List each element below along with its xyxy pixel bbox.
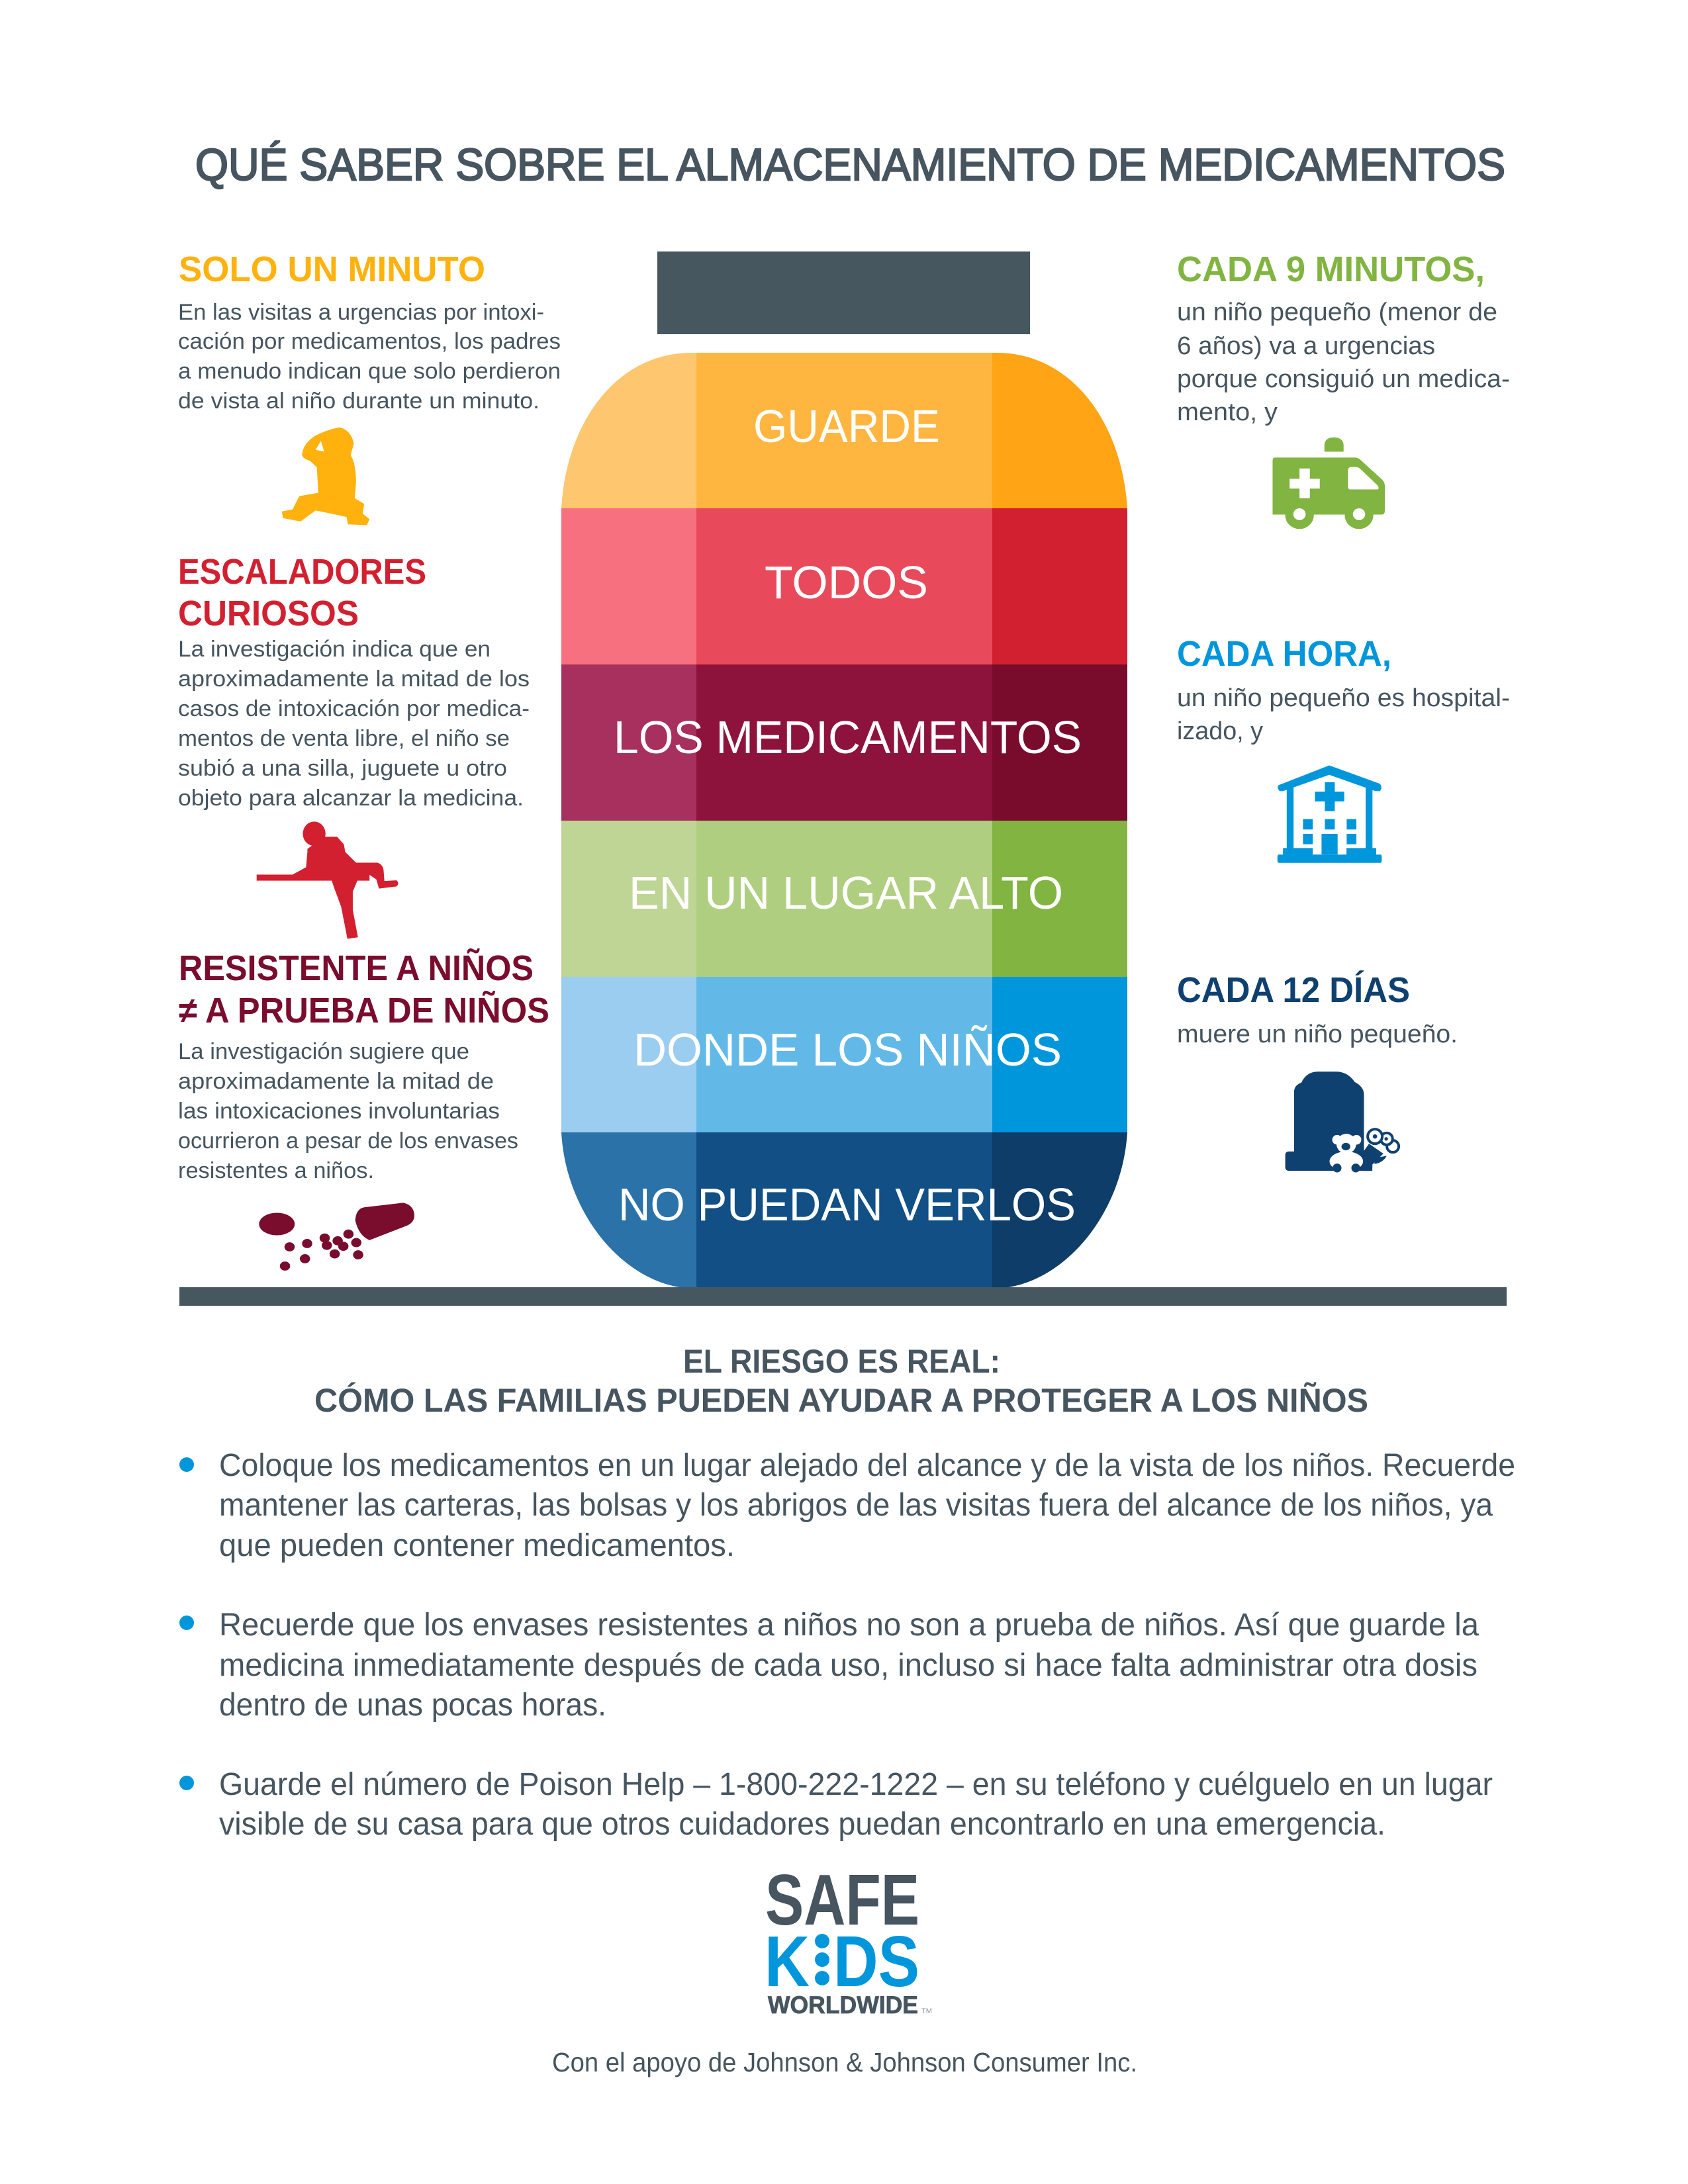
shelf: [179, 1287, 1507, 1306]
text block: cada 9 minutos: [1177, 298, 1510, 426]
heading: escaladores curiosos: ESCALADORES: [178, 552, 426, 592]
heading: cada 12 días: CADA 12 DÍAS: [1177, 970, 1410, 1010]
text block: escaladores curiosos: mentos de venta libre, el niño se: [178, 726, 510, 751]
panel: resistente a niños: [178, 948, 549, 1271]
text block: escaladores curiosos: objeto para alcanzar la medicina.: [178, 786, 524, 811]
bottle label text: EN UN LUGAR ALTO: [629, 867, 1063, 919]
text block: solo un minuto: En las visitas a urgencias por intoxi-: [178, 300, 544, 325]
logo: Safe Kids Worldwide: [765, 1860, 932, 2019]
text block: solo un minuto: cación por medicamentos, los padres: [178, 329, 561, 354]
text block: cada hora: [1177, 684, 1510, 745]
text block: resistente a niños: resistentes a niños.: [178, 1158, 374, 1183]
logo: Safe Kids Worldwide: WORLDWIDE: [768, 1991, 918, 2019]
panel: escaladores curiosos: [178, 552, 530, 938]
text block: escaladores curiosos: aproximadamente la mitad de los: [178, 666, 530, 692]
bottle label text: [614, 400, 1082, 1230]
list item 2: medicina inmediatamente después de cada uso, incluso si hace falta administrar otra dosis: [219, 1648, 1477, 1683]
text block: resistente a niños: [178, 1039, 518, 1183]
text block: solo un minuto: a menudo indican que solo perdieron: [178, 359, 561, 384]
text block: resistente a niños: ocurrieron a pesar de los envases: [178, 1128, 518, 1154]
list item 1: [179, 1448, 1515, 1563]
text block: cada 9 minutos: un niño pequeño (menor de: [1177, 298, 1497, 326]
icon: hospital: [1278, 766, 1382, 863]
logo: Safe Kids Worldwide: SAFE: [765, 1860, 919, 1940]
logo: Safe Kids Worldwide: K: [765, 1921, 810, 2002]
logo: Safe Kids Worldwide: DS: [833, 1921, 919, 2002]
list item 2: dentro de unas pocas horas.: [219, 1688, 606, 1723]
heading: resistente a niños: RESISTENTE A NIÑOS: [179, 948, 534, 988]
text block: resistente a niños: las intoxicaciones involuntarias: [178, 1099, 500, 1124]
icon: gravestone with teddy and flowers: [1286, 1071, 1399, 1172]
list item 3: visible de su casa para que otros cuidadores puedan encontrarlo en una emergencia.: [219, 1807, 1385, 1842]
bottle label text: GUARDE: [753, 400, 940, 452]
list item 2: [179, 1608, 1479, 1723]
text block: cada 9 minutos: mento, y: [1177, 398, 1278, 426]
list item 3: [179, 1767, 1493, 1842]
text block: solo un minuto: [178, 300, 561, 414]
heading: escaladores curiosos: CURIOSOS: [178, 594, 359, 633]
heading: cada 9 minutos: CADA 9 MINUTOS,: [1177, 250, 1485, 289]
icon: toddler: [282, 428, 369, 525]
bottle label text: DONDE LOS NIÑOS: [633, 1024, 1062, 1075]
footer credit: Con el apoyo de Johnson & Johnson Consumer Inc.: [552, 2047, 1137, 2077]
heading: escaladores curiosos: [178, 552, 426, 633]
text block: resistente a niños: La investigación sugiere que: [178, 1039, 469, 1064]
text block: escaladores curiosos: casos de intoxicación por medica-: [178, 696, 530, 721]
bottle: coloured bands: [561, 353, 1127, 1289]
heading: el riesgo es real: [314, 1343, 1368, 1419]
text block: escaladores curiosos: subió a una silla, juguete u otro: [178, 756, 507, 781]
heading: el riesgo es real: EL RIESGO ES REAL:: [683, 1343, 1000, 1380]
bullet: [179, 1615, 194, 1630]
list item 1: mantener las carteras, las bolsas y los abrigos de las visitas fuera del alcance de los niños, ya: [219, 1488, 1493, 1523]
panel: cada 9 minutos: [1177, 250, 1510, 529]
icon: spilled pills: [259, 1203, 414, 1271]
text block: resistente a niños: aproximadamente la mitad de: [178, 1069, 494, 1094]
heading: cada hora: CADA HORA,: [1177, 634, 1391, 674]
text block: cada 9 minutos: 6 años) va a urgencias: [1177, 332, 1435, 360]
heading: resistente a niños: [179, 948, 549, 1030]
heading: el riesgo es real: CÓMO LAS FAMILIAS PUEDEN AYUDAR A PROTEGER A LOS NIÑOS: [314, 1382, 1368, 1419]
panel: cada hora: [1177, 634, 1510, 863]
logo: Safe Kids Worldwide: TM: [921, 2007, 932, 2015]
panel: solo un minuto: [178, 250, 561, 525]
bottle cap: [657, 251, 1030, 334]
bottle label text: LOS MEDICAMENTOS: [614, 711, 1082, 763]
text block: solo un minuto: de vista al niño durante un minuto.: [178, 388, 539, 414]
icon: ambulance: [1272, 437, 1385, 529]
icon: climbing child: [257, 821, 398, 938]
text block: cada 9 minutos: porque consiguió un medica-: [1177, 365, 1510, 393]
text block: cada hora: izado, y: [1177, 717, 1263, 745]
heading: resistente a niños: ≠ A PRUEBA DE NIÑOS: [179, 991, 549, 1030]
title: QUÉ SABER SOBRE EL ALMACENAMIENTO DE MEDICAMENTOS: [195, 140, 1505, 190]
text block: cada 12 días: muere un niño pequeño.: [1177, 1021, 1458, 1048]
bottle label text: NO PUEDAN VERLOS: [618, 1179, 1076, 1230]
text block: cada hora: un niño pequeño es hospital-: [1177, 684, 1510, 712]
bottle label text: TODOS: [765, 557, 928, 608]
list item 1: que pueden contener medicamentos.: [219, 1528, 735, 1563]
text block: escaladores curiosos: [178, 637, 530, 811]
bullet: [179, 1776, 194, 1790]
list item 3: Guarde el número de Poison Help – 1-800-222-1222 – en su teléfono y cuélguelo en un lugar: [219, 1767, 1493, 1802]
heading: solo un minuto: SOLO UN MINUTO: [179, 250, 485, 289]
list item 1: Coloque los medicamentos en un lugar alejado del alcance y de la vista de los niños. Recuerde: [219, 1448, 1515, 1483]
panel: cada 12 días: [1177, 970, 1458, 1172]
list item 2: Recuerde que los envases resistentes a niños no son a prueba de niños. Así que guarde la: [219, 1608, 1479, 1643]
text block: escaladores curiosos: La investigación indica que en: [178, 637, 491, 662]
bullet: [179, 1457, 194, 1472]
